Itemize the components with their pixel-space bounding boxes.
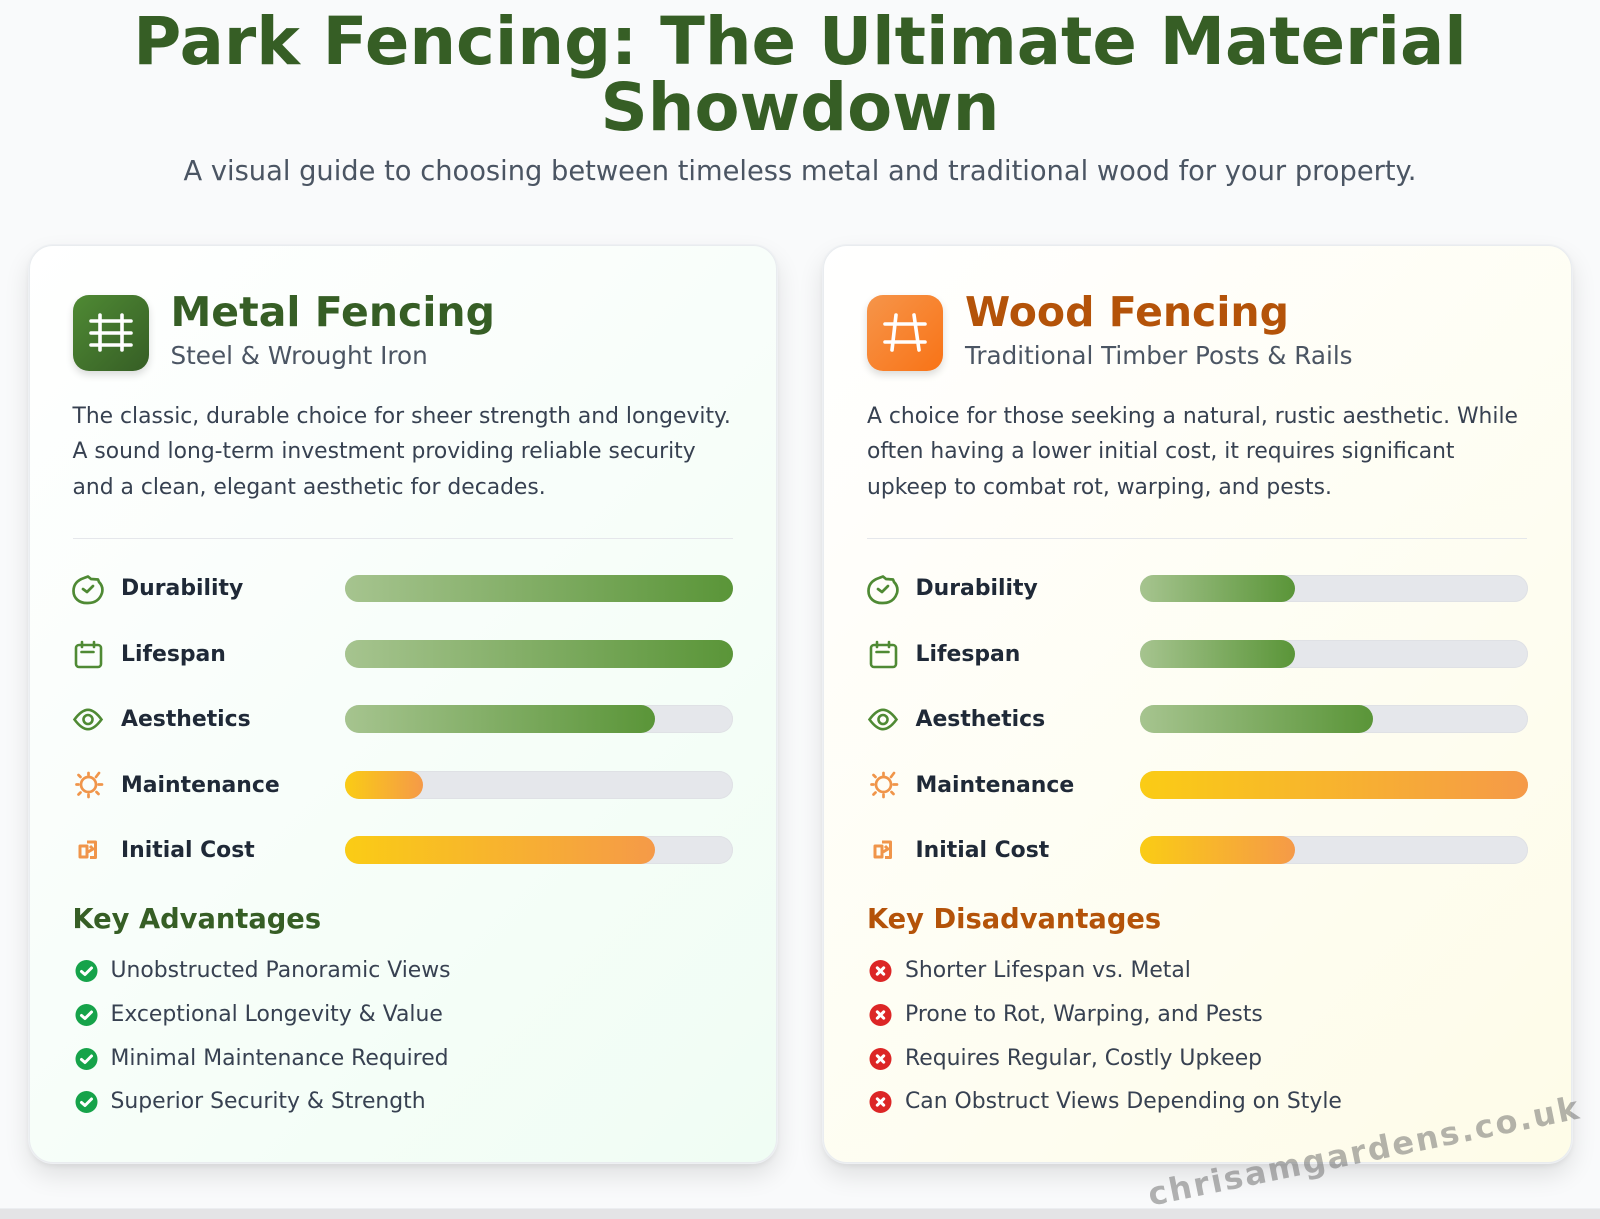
subheading: Traditional Timber Posts & Rails [965,341,1353,370]
rating: lifespan [870,640,1528,668]
disadvantage 4: Can Obstruct Views Depending on Style [905,1089,1342,1114]
panel: metal fencing [28,245,777,1162]
bar: 80% [345,836,733,864]
label: Aesthetics [121,706,251,732]
rating: lifespan [74,640,733,668]
icon: metal fence [72,295,148,371]
rating: aesthetics [868,705,1528,733]
disadvantage 2: Prone to Rot, Warping, and Pests [905,1002,1263,1027]
description: A sound long-term investment providing reliable security [72,439,696,464]
label: Durability [121,576,243,601]
label: Lifespan [916,642,1020,666]
subheading: Steel & Wrought Iron [170,341,428,370]
bar: 40% [1140,836,1528,864]
title [133,4,1467,146]
heading: wood fencing: Wood Fencing [965,288,1289,336]
bar: 80% [345,705,733,732]
heading: key disadvantages: Key Disadvantages [867,904,1161,935]
bar: 60% [1140,705,1528,732]
label: Lifespan [121,642,226,666]
description: and a clean, elegant aesthetic for decades. [72,475,546,500]
bar: 100% [345,574,733,602]
label: Maintenance [121,772,280,798]
title: Showdown [601,70,999,146]
rating: initial cost [874,836,1528,864]
label: Maintenance [916,772,1074,798]
rating: durability [867,575,1528,604]
description [72,404,731,500]
description [867,404,1518,500]
heading: key advantages: Key Advantages [72,904,321,935]
description: upkeep to combat rot, warping, and pests. [867,475,1332,500]
rating: durability [72,575,733,604]
watermark: chrisamgardens.co.uk [1145,1088,1584,1214]
label: Initial Cost [121,838,255,862]
description: often having a lower initial cost, it requires significant [867,439,1454,464]
title: Park Fencing: The Ultimate Material [133,4,1467,80]
bar: 20% [345,771,733,798]
rating: maintenance [75,771,733,799]
subtitle: A visual guide to choosing between timeless metal and traditional wood for your property. [184,156,1416,187]
advantage 2: Exceptional Longevity & Value [110,1002,443,1027]
bar: 40% [1140,574,1528,602]
heading: metal fencing: Metal Fencing [170,288,495,336]
description: A choice for those seeking a natural, rustic aesthetic. While [867,404,1518,429]
bar: 100% [345,640,733,668]
advantage 4: Superior Security & Strength [110,1089,426,1114]
disadvantage 1: Shorter Lifespan vs. Metal [905,958,1191,983]
rating: aesthetics [73,705,733,733]
rating: initial cost [78,836,733,864]
bar: 100% [1140,771,1528,798]
disadvantage 3: Requires Regular, Costly Upkeep [905,1046,1262,1070]
label: Aesthetics [916,706,1045,732]
icon: wood fence [867,295,943,371]
label: Durability [916,576,1038,601]
bar: 40% [1140,640,1528,668]
panel: wood fencing [823,245,1572,1162]
description: The classic, durable choice for sheer strength and longevity. [72,404,731,429]
advantage 1: Unobstructed Panoramic Views [110,958,451,983]
rating: maintenance [870,771,1528,799]
footer band [0,1208,1600,1219]
label: Initial Cost [916,838,1049,862]
advantage 3: Minimal Maintenance Required [110,1046,449,1070]
